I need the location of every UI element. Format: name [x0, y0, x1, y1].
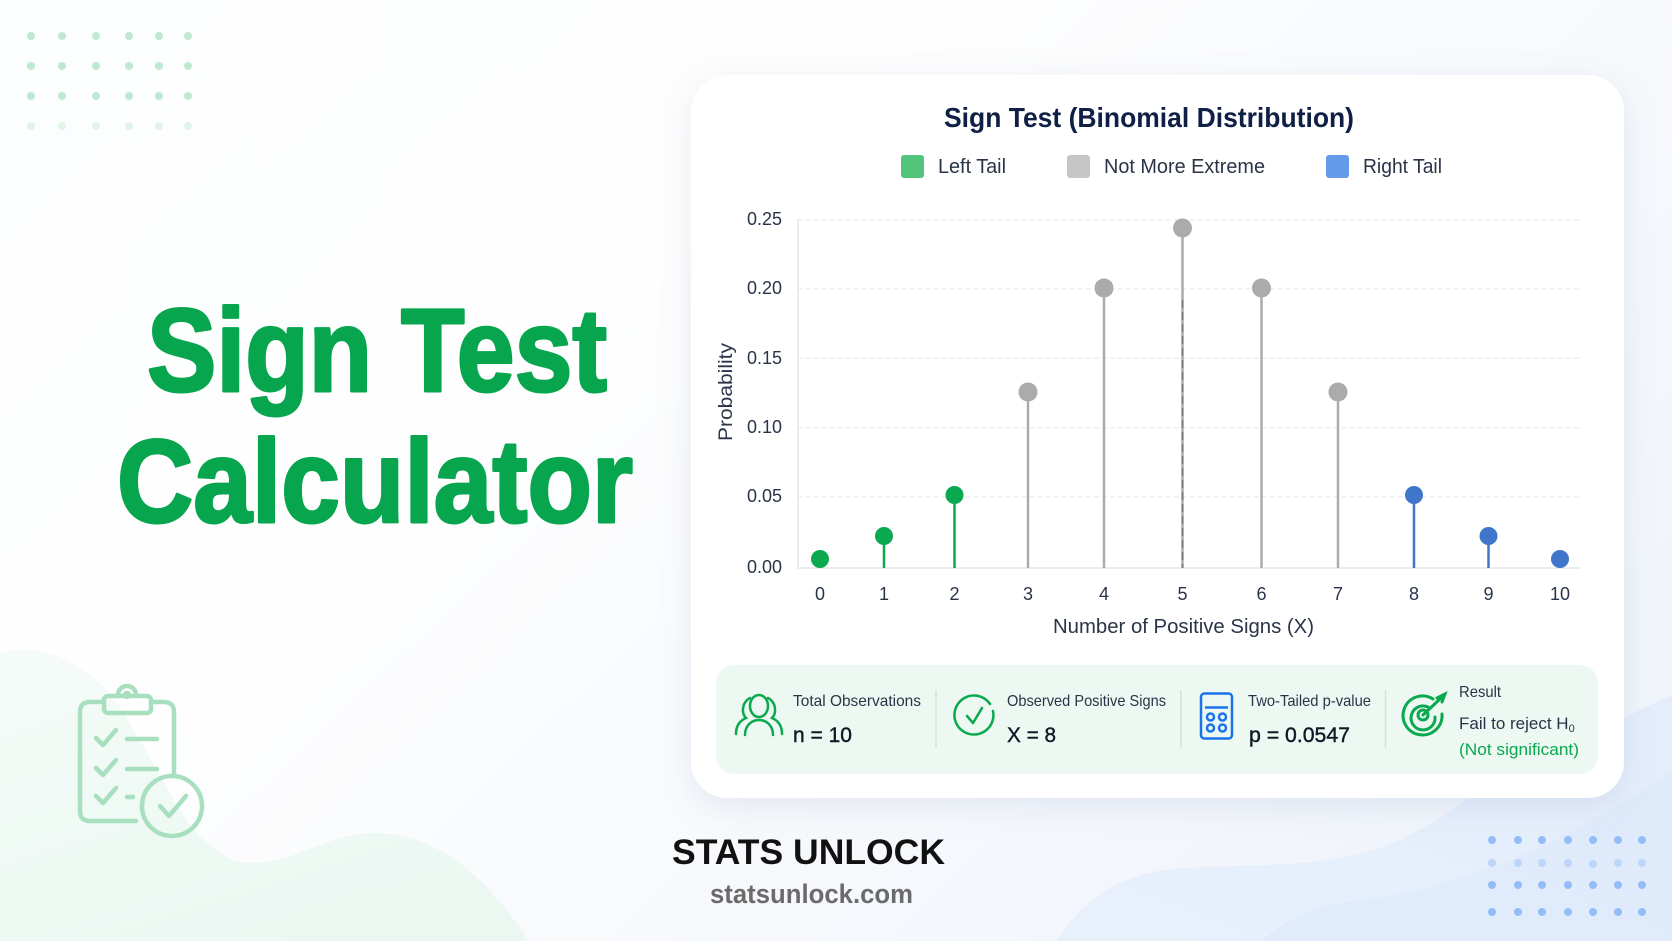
- y axis labels: 0.20: [747, 278, 782, 298]
- stat: result: (Not significant): [1459, 740, 1579, 759]
- icon: people: [736, 695, 782, 735]
- chart: binomial lollipop: [716, 209, 1580, 638]
- dot grid: bottom right: [1488, 836, 1646, 916]
- icon: target: [1403, 694, 1445, 735]
- stat: p-value: p = 0.0547: [1249, 724, 1350, 747]
- legend: [901, 155, 1442, 178]
- stat: total observations: Total Observations: [793, 693, 921, 710]
- main title: Calculator: [117, 416, 633, 548]
- x axis labels: 4: [1099, 584, 1109, 604]
- x axis labels: 9: [1483, 584, 1494, 604]
- stat: observed positive signs: [1007, 693, 1166, 747]
- x axis labels: 2: [949, 584, 960, 604]
- website: statsunlock.com: [710, 879, 913, 909]
- stat: result: Fail to reject H: [1459, 714, 1569, 733]
- stat: result: [1459, 684, 1579, 759]
- y axis labels: 0.05: [747, 486, 782, 506]
- y axis labels: 0.00: [747, 557, 782, 577]
- stat: result: Result: [1459, 684, 1502, 701]
- x axis labels: 5: [1177, 584, 1188, 604]
- stat: total observations: n = 10: [793, 724, 852, 747]
- main title: [117, 285, 633, 548]
- y axis labels: [747, 209, 782, 577]
- main title: Sign Test: [147, 285, 607, 417]
- y axis labels: 0.10: [747, 417, 782, 437]
- legend: Right Tail: [1363, 156, 1442, 178]
- stems and points: not more extreme: [1018, 218, 1348, 568]
- y axis labels: 0.25: [747, 209, 782, 229]
- x axis labels: 6: [1256, 584, 1267, 604]
- stat: p-value: [1248, 693, 1371, 747]
- stat: result: 0: [1569, 723, 1575, 735]
- x axis labels: 7: [1333, 584, 1343, 604]
- legend: Left Tail: [938, 156, 1006, 178]
- x axis labels: 8: [1409, 584, 1419, 604]
- icon: clipboard with check: [80, 686, 202, 836]
- brand name: STATS UNLOCK: [672, 833, 945, 872]
- panel: chart card: [691, 75, 1624, 798]
- chart title: Sign Test (Binomial Distribution): [944, 102, 1354, 133]
- x axis labels: 10: [1550, 584, 1570, 604]
- dot grid: top left: [27, 32, 192, 130]
- stems and points: right tail: [1405, 486, 1569, 568]
- x axis labels: 1: [879, 584, 889, 604]
- x axis labels: [815, 584, 1570, 604]
- stat: p-value: Two-Tailed p-value: [1248, 693, 1371, 710]
- icon: calculator: [1201, 694, 1232, 738]
- decorative blue wave: [1056, 695, 1672, 941]
- x axis labels: 0: [815, 584, 825, 604]
- panel: summary strip: [716, 665, 1598, 774]
- stat: observed positive signs: X = 8: [1007, 724, 1056, 747]
- stat: total observations: [793, 693, 921, 747]
- x axis title: Number of Positive Signs (X): [1053, 616, 1314, 638]
- icon: check circle: [954, 696, 993, 735]
- y axis labels: 0.15: [747, 348, 782, 368]
- x axis labels: 3: [1023, 584, 1033, 604]
- decorative green wave: [0, 650, 529, 941]
- legend: Not More Extreme: [1104, 156, 1265, 178]
- y axis title: Probability: [716, 342, 737, 441]
- stat: observed positive signs: Observed Positive Signs: [1007, 693, 1166, 710]
- stems and points: left tail: [811, 486, 964, 568]
